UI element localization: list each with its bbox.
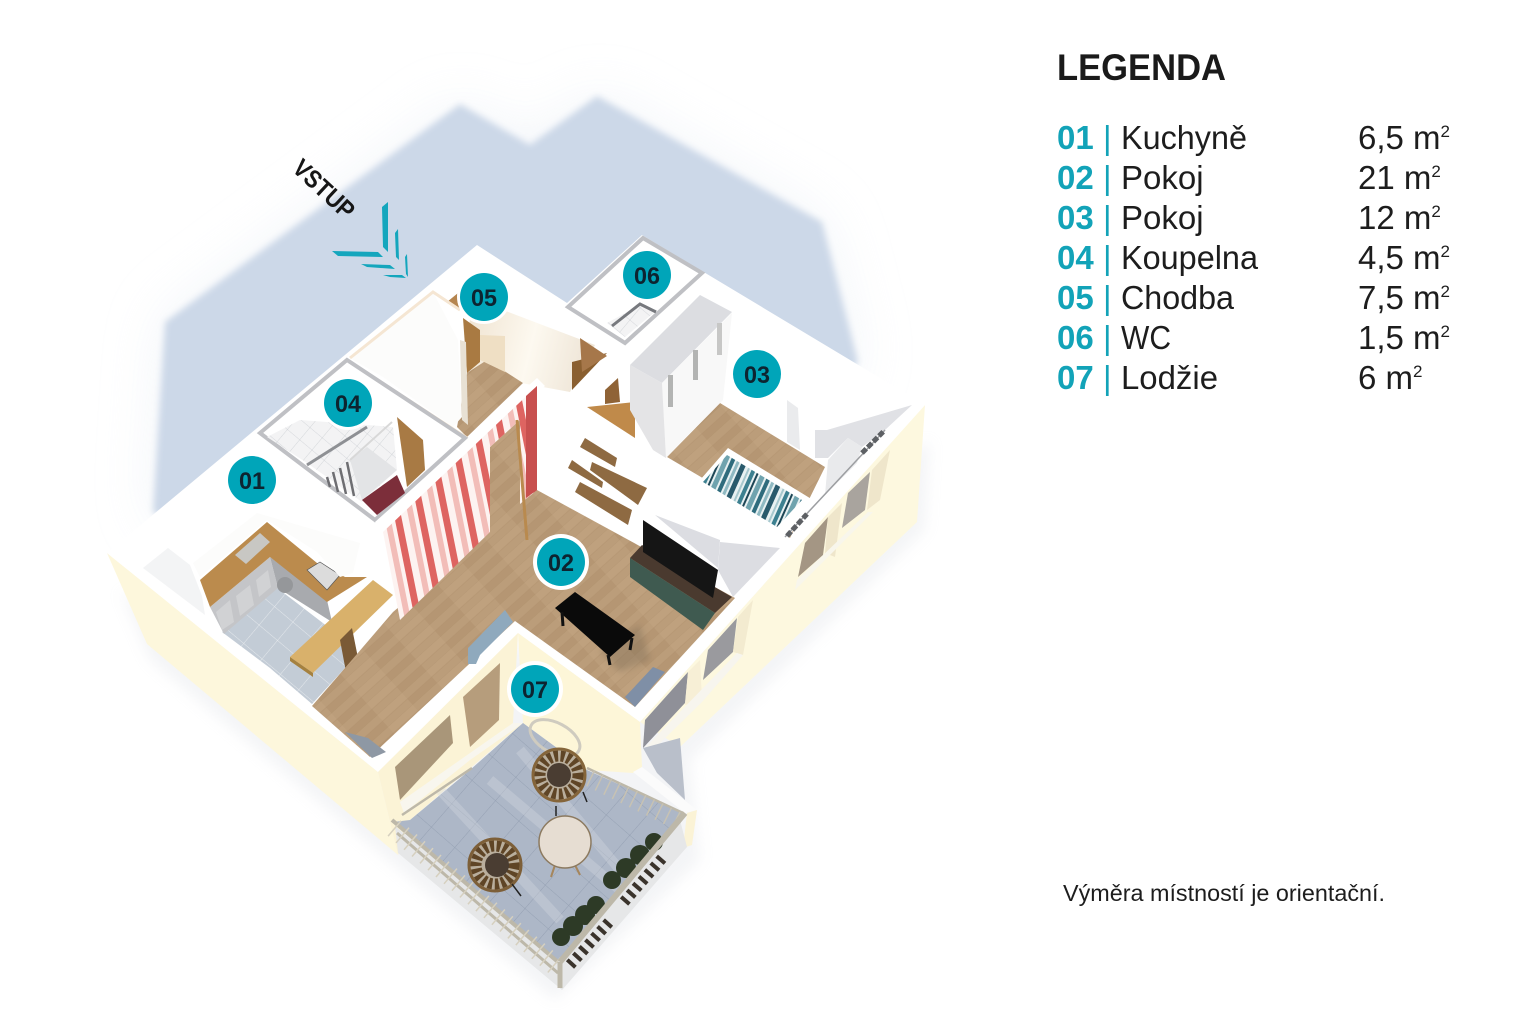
icon: entrance arrow [332, 202, 408, 278]
marker 04 [321, 376, 375, 430]
legend row 05: 7,5 m [1358, 279, 1441, 316]
legend row 04: Koupelna [1121, 239, 1259, 276]
legend row 06: 06 [1057, 319, 1094, 356]
railing [392, 768, 685, 988]
legend row 05: Chodba [1121, 279, 1235, 316]
side wall [633, 738, 697, 848]
legend row 07: 2 [1413, 362, 1422, 381]
legend row 01 [1057, 119, 1450, 156]
planters [552, 833, 665, 965]
legend row 05: | [1103, 279, 1112, 316]
legend row 01: 01 [1057, 119, 1094, 156]
fridge corner [143, 548, 205, 615]
kitchen floor tiles [222, 587, 345, 704]
legend row 02: 02 [1057, 159, 1094, 196]
ground contact shadow [120, 440, 930, 1000]
shower curtain [327, 462, 354, 496]
loggia left window [395, 715, 453, 800]
room 02: living room floor [312, 420, 735, 757]
loggia [378, 633, 697, 990]
legend row 03 [1057, 199, 1441, 236]
legend row 02 [1057, 159, 1441, 196]
marker 06: 06 [634, 263, 660, 290]
upper cabinets [193, 513, 360, 577]
built-in wardrobe [350, 292, 462, 427]
cooktop [307, 562, 340, 590]
bedroom wall shade [815, 405, 912, 458]
marker 03 [730, 347, 784, 401]
exterior wall: right with windows [640, 405, 925, 750]
legend row 02: 21 m [1358, 159, 1431, 196]
bed [700, 448, 813, 540]
nightstand [825, 438, 862, 495]
legend row 01: | [1103, 119, 1112, 156]
legend row 07: Lodžie [1121, 359, 1218, 396]
room 05: hallway [350, 292, 607, 438]
legend row 07 [1057, 359, 1422, 396]
marker 01 [225, 453, 279, 507]
legend row 01: Kuchyně [1121, 119, 1247, 156]
marker 07 [507, 661, 563, 717]
room 03: bedroom [587, 295, 912, 540]
bar counter [290, 580, 393, 673]
kitchen countertop [200, 522, 367, 607]
room 01: kitchen [143, 513, 393, 704]
window D [842, 472, 870, 528]
marker 06 [620, 248, 674, 302]
bath tub [350, 447, 397, 500]
legend row 04: 4,5 m [1358, 239, 1441, 276]
legend row 06: 1,5 m [1358, 319, 1441, 356]
chair [469, 839, 521, 896]
wall top silhouette [107, 235, 925, 772]
loggia floor [393, 723, 683, 962]
TV cabinet [630, 545, 732, 630]
legend row 03: | [1103, 199, 1112, 236]
legend row 05 [1057, 279, 1450, 316]
hallway door [463, 318, 480, 373]
entrance label VSTUP: VSTUP [287, 154, 360, 225]
legend table [1057, 119, 1450, 396]
building cast shadow [153, 96, 858, 640]
shelves [568, 438, 647, 525]
marker 01: 01 [239, 468, 265, 495]
ghost chair [524, 712, 586, 764]
coffee table [555, 592, 650, 672]
legend row 01: 2 [1441, 122, 1450, 141]
apartment model [107, 235, 925, 990]
striped wall [375, 378, 545, 620]
legend row 04: | [1103, 239, 1112, 276]
legend row 05: 05 [1057, 279, 1094, 316]
sink [235, 533, 270, 564]
legend row 03: Pokoj [1121, 199, 1204, 236]
marker 03: 03 [744, 362, 770, 389]
wardrobe [630, 295, 732, 458]
window A [643, 672, 688, 748]
footnote: Výměra místností je orientační. [1063, 880, 1385, 906]
legend row 06 [1057, 319, 1450, 356]
legend row 03: 2 [1431, 202, 1441, 221]
marker 05: 05 [471, 285, 497, 312]
railing shadows on floor [440, 750, 620, 920]
legend title: LEGENDA [1057, 47, 1226, 88]
room 04: bathroom [260, 360, 465, 520]
TV [643, 520, 718, 598]
stone edge [395, 820, 687, 990]
legend row 06: 2 [1441, 322, 1450, 341]
kitchen cabinets [210, 557, 278, 634]
far doors [572, 353, 607, 390]
marker 04: 04 [335, 391, 362, 418]
exterior wall: left [107, 553, 398, 855]
legend row 03: 03 [1057, 199, 1094, 236]
legend row 07: 6 m [1358, 359, 1413, 396]
bathroom door [397, 417, 425, 487]
legend row 04: 04 [1057, 239, 1094, 276]
sofa [468, 610, 513, 664]
legend row 03: 12 m [1358, 199, 1431, 236]
legend row 01: 6,5 m [1358, 119, 1441, 156]
legend row 06: | [1103, 319, 1112, 356]
table [539, 816, 591, 877]
TV wall shade [655, 515, 780, 597]
door [587, 402, 635, 438]
legend row 02: Pokoj [1121, 159, 1204, 196]
room 06: WC [568, 238, 702, 343]
curtain rod [785, 430, 885, 537]
legend row 05: 2 [1441, 282, 1450, 301]
legend row 04: 2 [1441, 242, 1450, 261]
window C [798, 517, 828, 577]
window B [703, 618, 737, 680]
legend row 07: 07 [1057, 359, 1094, 396]
legend row 02: 2 [1431, 162, 1441, 181]
marker 07: 07 [522, 677, 548, 704]
legend row 04 [1057, 239, 1450, 276]
legend row 07: | [1103, 359, 1112, 396]
marker 02: 02 [548, 550, 574, 577]
marker 05 [457, 270, 511, 324]
legend row 06: WC [1121, 319, 1171, 356]
loggia left wall [378, 633, 523, 855]
marker 02 [533, 534, 589, 590]
legend row 02: | [1103, 159, 1112, 196]
chair [533, 749, 587, 816]
loggia back wall right [518, 633, 642, 773]
